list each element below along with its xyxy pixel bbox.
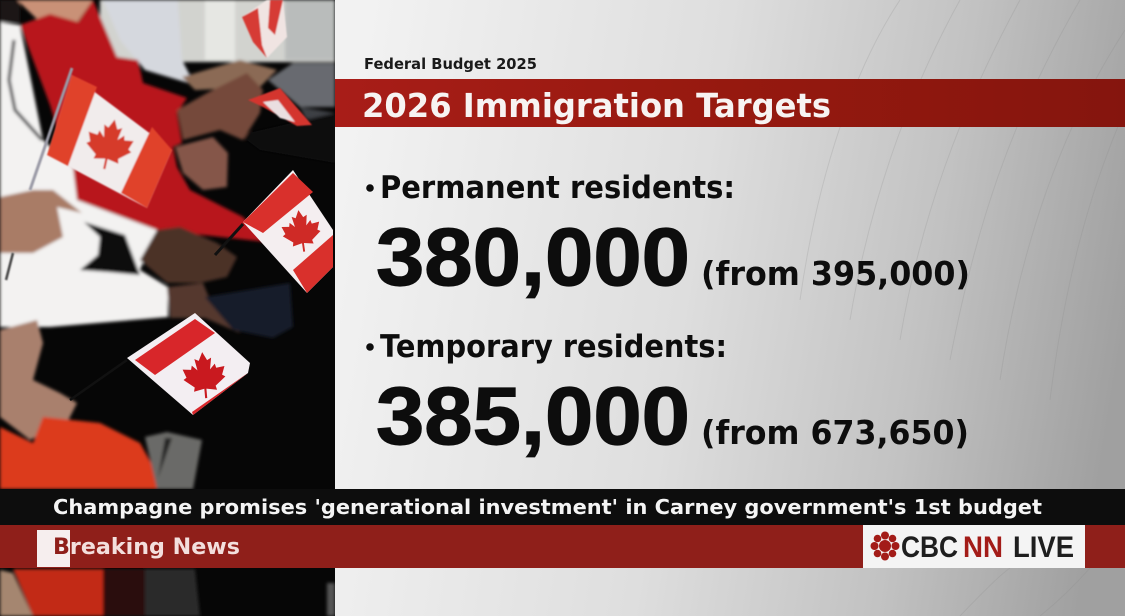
ticker: headline band: Champagne promises 'generational investment' in Carney government's 1st budget <box>53 495 1042 519</box>
tablet <box>205 283 293 338</box>
heading band <box>335 79 1125 127</box>
icon: large flag <box>6 68 172 280</box>
title: 2026 Immigration Targets <box>362 86 831 125</box>
block: permanent residents <box>366 170 970 303</box>
number: 380,000: 380,000 <box>376 212 690 303</box>
photo: seated people holding Canadian flags <box>0 0 335 616</box>
red jacket <box>20 0 267 242</box>
icon: small flag <box>248 88 312 126</box>
hair and face <box>0 0 20 22</box>
icon: lower flag <box>70 313 250 415</box>
ticker: breaking news band <box>0 525 1125 568</box>
ticker: breaking news band: Breaking News <box>53 535 240 560</box>
logo: CBC News Live: LIVE <box>1013 531 1074 564</box>
note: from 395,000: (from 395,000) <box>701 254 970 293</box>
logo: CBC News Live: NN <box>963 531 1003 564</box>
number: 385,000: 385,000 <box>376 371 690 462</box>
hands <box>182 60 277 90</box>
bullet <box>366 343 374 351</box>
icon: CBC gem <box>870 532 900 560</box>
text: eyebrow: Federal Budget 2025 <box>364 55 537 73</box>
label: temporary residents: Temporary residents: <box>380 329 727 365</box>
blurred room backdrop <box>100 0 335 62</box>
logo: CBC News Live: CBC <box>901 531 958 564</box>
white shirt <box>0 22 168 327</box>
block: temporary residents <box>366 329 969 462</box>
icon: middle flag <box>215 170 333 293</box>
panel: grey background <box>335 0 1125 616</box>
black trousers upper <box>244 112 335 140</box>
chair <box>145 432 202 489</box>
label: permanent residents: Permanent residents: <box>380 170 735 206</box>
icon: blurred top flag <box>242 0 287 58</box>
logo: CBC News Live <box>863 525 1085 568</box>
ticker: headline band <box>0 489 1125 525</box>
note: from 673,650: (from 673,650) <box>701 413 969 452</box>
bullet <box>366 184 374 192</box>
orange trousers <box>0 417 157 489</box>
